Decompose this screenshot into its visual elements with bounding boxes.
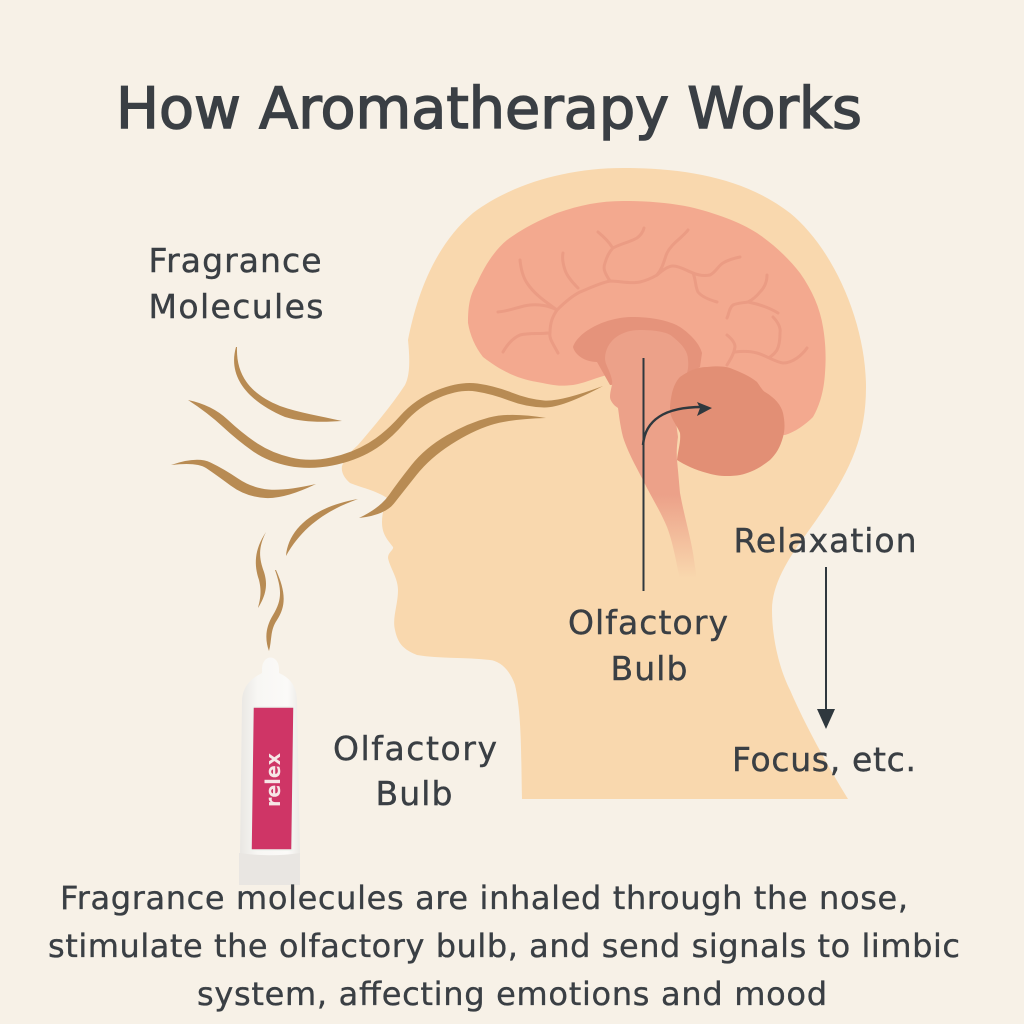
brain stem (605, 330, 697, 580)
brain (468, 201, 826, 580)
cerebellum (670, 366, 784, 476)
description text: Fragrance molecules are inhaled through the nose, (60, 879, 908, 917)
label: olfactory bulb on head: Olfactory (568, 603, 728, 642)
label: fragrance molecules: Fragrance (148, 241, 322, 280)
arrow: relaxation to focus (817, 567, 835, 729)
corpus callosum arc (573, 317, 702, 385)
description text: system, affecting emotions and mood (197, 975, 827, 1013)
label: focus: Focus, etc. (732, 740, 916, 779)
description text: stimulate the olfactory bulb, and send signals to limbic (48, 927, 960, 965)
inhaler (239, 658, 300, 885)
label: olfactory bulb on head (568, 603, 728, 688)
label: olfactory bulb lower (333, 729, 497, 813)
label: olfactory bulb on head: Bulb (610, 649, 688, 688)
label: fragrance molecules: Molecules (148, 287, 324, 326)
inhaler brand: relex (261, 753, 285, 807)
label: fragrance molecules (148, 241, 324, 326)
inhaler body (240, 658, 300, 855)
brain folds (498, 228, 807, 365)
brain cerebrum (468, 201, 826, 435)
head silhouette (342, 168, 866, 799)
vertical pointer line (642, 358, 644, 591)
inhaler label (251, 707, 294, 850)
description text (48, 879, 960, 1013)
inhaler cap base (239, 853, 300, 885)
label: relaxation: Relaxation (734, 521, 916, 560)
title: How Aromatherapy Works (116, 76, 862, 142)
label: olfactory bulb lower: Olfactory (333, 729, 497, 768)
fragrance streams (171, 347, 603, 651)
label: olfactory bulb lower: Bulb (376, 774, 452, 813)
curved arrow to limbic area (643, 402, 712, 445)
